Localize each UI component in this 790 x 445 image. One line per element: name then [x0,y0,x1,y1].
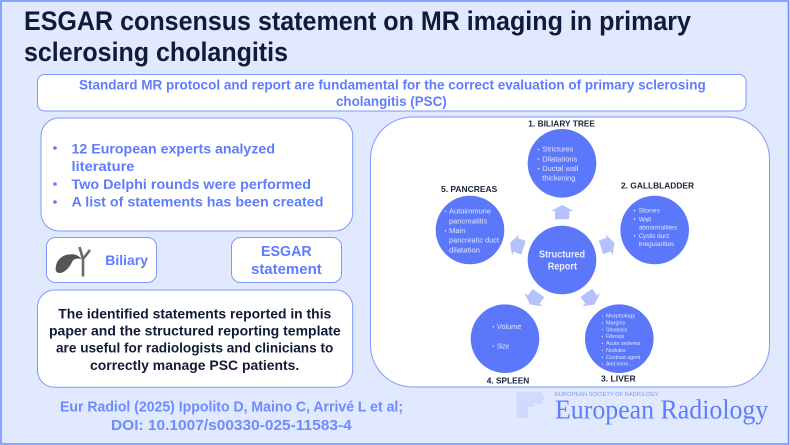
panel: methods: 12 European experts analyzed [72,140,275,156]
panel: methods: literature [72,158,135,174]
panel: methods: A list of statements has been created [72,194,324,210]
node: biliary tree: Dilatations [542,156,578,163]
node: spleen: Volume [497,324,521,331]
node: gallbladder: 2. GALLBLADDER [621,181,694,191]
node: gallbladder: Wall [639,216,652,223]
citation: Eur Radiol (2025) Ippolito D, Maino C, Arrivé L et al; [60,399,403,416]
node: gallbladder: irregularities [639,241,675,248]
panel: key message [38,74,746,111]
node: pancreas: dilatation [449,247,480,254]
title: sclerosing cholangitis [24,37,288,67]
node: liver: 3. LIVER [601,374,636,384]
panel: biliary [46,238,156,282]
node: pancreas: 5. PANCREAS [441,184,498,194]
node: structured report: Structured [539,249,585,261]
icon: journal dot grid [517,392,544,418]
node: liver: Morphology [606,314,635,320]
panel: ESGAR statement: statement [251,262,322,278]
logo: European Radiology: EUROPEAN SOCIETY OF RADIOLOGY [555,392,659,398]
node: gallbladder: Cystic duct [639,233,669,240]
node: biliary tree [528,119,596,198]
logo: European Radiology: European Radiology [555,394,769,424]
panel: ESGAR statement [232,238,342,282]
citation [60,399,403,434]
node: pancreas: Main [449,228,466,235]
node: spleen [471,304,539,385]
node: liver: Acute oedema [606,341,640,347]
node: pancreas [436,184,504,264]
icon: gallbladder and bile ducts [56,247,90,276]
node: liver: Steatosis [606,327,628,333]
node: gallbladder: abnormalities [639,224,678,231]
node: spleen: Size [497,343,509,350]
panel: conclusion: paper and the structured reporting template [49,323,341,339]
node: biliary tree: Strictures [542,147,574,154]
node: biliary tree: thickening [542,176,575,183]
panel: key message: cholangitis (PSC) [336,94,447,109]
node: pancreas: Autoimmune [449,209,491,216]
panel: ESGAR statement: ESGAR [261,244,312,260]
node: liver: And more… [606,362,633,368]
node: liver: Contrast agent [606,355,641,361]
node: biliary tree: Ductal wall [542,166,579,173]
node: structured report: Report [548,260,577,272]
panel: key message: Standard MR protocol and report are fundamental for the correct evaluation of primary sclerosing [79,78,706,92]
panel: methods: Two Delphi rounds were performed [72,176,311,192]
node: liver: Margins [606,321,626,327]
node: pancreas: pancreatic duct [449,238,499,245]
panel: conclusion: The identified statements reported in this [58,305,332,321]
node: gallbladder: Stones [639,208,661,215]
panel: methods [41,118,353,231]
panel: conclusion [38,290,353,387]
node: spleen: 4. SPLEEN [487,375,529,385]
panel: conclusion: correctly manage PSC patients. [90,357,299,373]
node: pancreas: pancreatitis [449,218,488,225]
node: liver [585,304,654,384]
panel: biliary: Biliary [105,252,148,268]
node: biliary tree: 1. BILIARY TREE [528,119,595,129]
node: gallbladder [620,181,694,264]
panel: conclusion: are useful for radiologists and clinicians to [56,340,333,356]
title: ESGAR consensus statement on MR imaging in primary [24,6,691,36]
citation: DOI: 10.1007/s00330-025-11583-4 [111,417,352,434]
title [24,6,691,67]
arrows [506,205,618,311]
node: liver: Nodules [606,348,626,354]
node: structured report [528,226,596,294]
panel: structured report diagram [370,117,770,387]
node: liver: Fibrosis [606,334,625,340]
